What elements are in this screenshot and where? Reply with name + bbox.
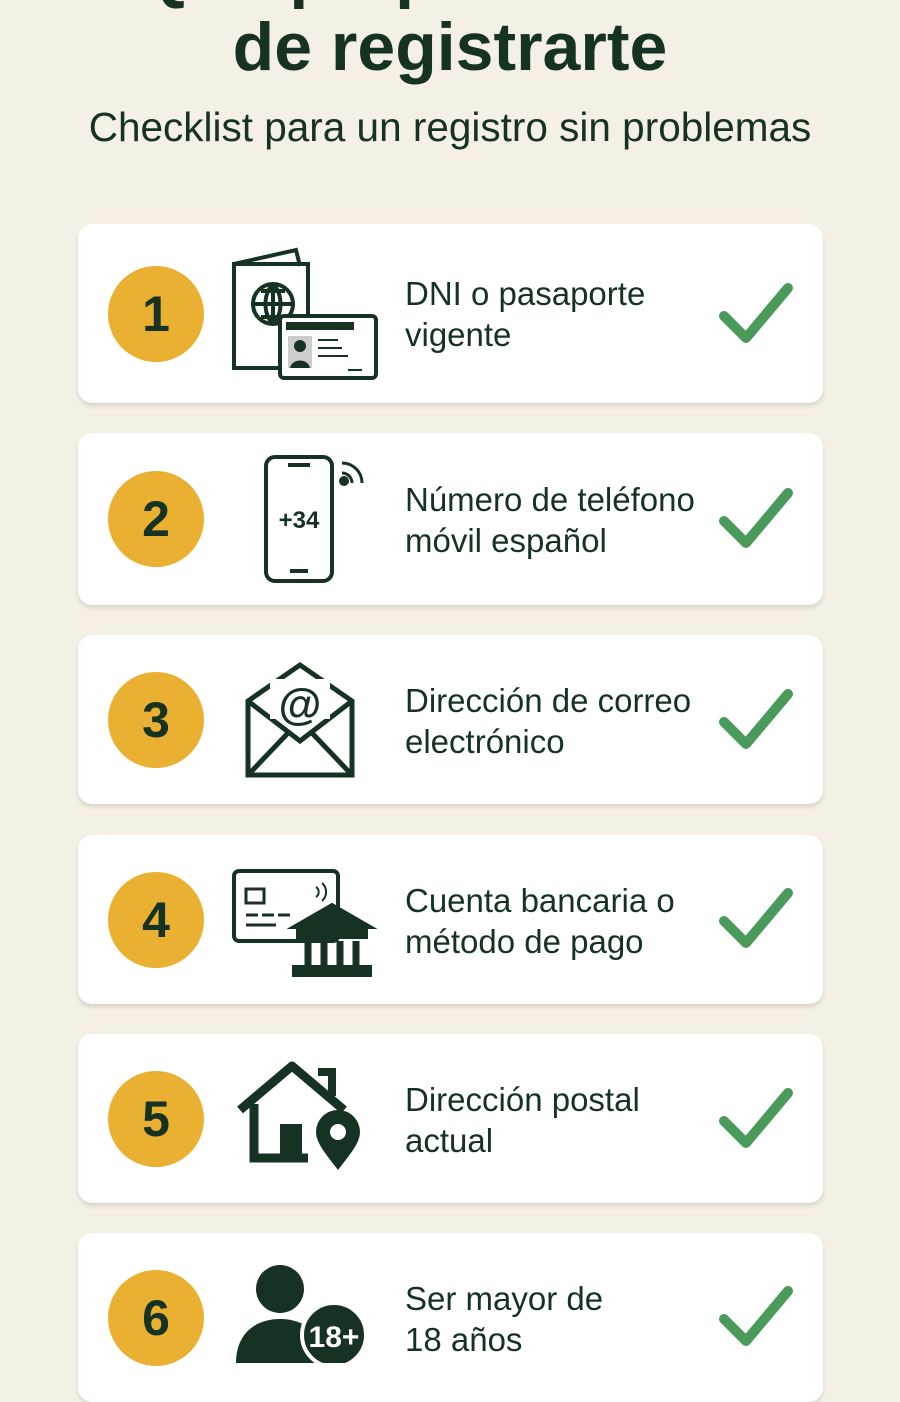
subtitle: Checklist para un registro sin problemas bbox=[89, 104, 811, 150]
text bbox=[405, 682, 691, 760]
number 3 bbox=[108, 672, 204, 768]
icon: phone bbox=[264, 455, 364, 583]
text: electrónico bbox=[405, 723, 565, 760]
text bbox=[405, 882, 675, 960]
card 5 bbox=[78, 1034, 823, 1203]
check bbox=[719, 1088, 793, 1148]
card 6 bbox=[78, 1233, 823, 1402]
number 4 bbox=[108, 872, 204, 968]
text: Número de teléfono bbox=[405, 481, 695, 518]
text: vigente bbox=[405, 316, 511, 353]
text bbox=[405, 275, 645, 353]
icon: email bbox=[246, 662, 354, 778]
card 2 bbox=[78, 433, 823, 605]
title: de registrarte bbox=[233, 9, 667, 85]
text bbox=[405, 1280, 603, 1358]
text: Cuenta bancaria o bbox=[405, 882, 675, 919]
text bbox=[405, 1081, 640, 1159]
check bbox=[719, 488, 793, 548]
check bbox=[719, 888, 793, 948]
text: Dirección postal bbox=[405, 1081, 640, 1118]
number 6 bbox=[108, 1270, 204, 1366]
icon: house with pin bbox=[237, 1062, 360, 1170]
number 1: 1 bbox=[142, 286, 170, 342]
number 1 bbox=[108, 266, 204, 362]
card 3 bbox=[78, 635, 823, 804]
card 4 bbox=[78, 835, 823, 1004]
check bbox=[719, 689, 793, 749]
number 2 bbox=[108, 471, 204, 567]
icon: person 18+ bbox=[236, 1265, 364, 1363]
icon: card and bank bbox=[232, 869, 378, 977]
number 5: 5 bbox=[142, 1091, 170, 1147]
card 1 bbox=[78, 224, 823, 403]
check bbox=[719, 1286, 793, 1346]
text: Dirección de correo bbox=[405, 682, 691, 719]
number 6: 6 bbox=[142, 1290, 170, 1346]
text: método de pago bbox=[405, 923, 644, 960]
number 5 bbox=[108, 1071, 204, 1167]
text: 18 años bbox=[405, 1321, 522, 1358]
number 3: 3 bbox=[142, 692, 170, 748]
icon: person 18+: 18+ bbox=[309, 1321, 359, 1354]
text bbox=[405, 481, 695, 559]
icon: passport and id bbox=[232, 248, 378, 380]
text: Ser mayor de bbox=[405, 1280, 603, 1317]
icon: email: @ bbox=[279, 680, 321, 729]
text: móvil español bbox=[405, 522, 607, 559]
check bbox=[719, 283, 793, 343]
icon: phone: +34 bbox=[279, 507, 320, 534]
text: DNI o pasaporte bbox=[405, 275, 645, 312]
text: actual bbox=[405, 1122, 493, 1159]
number 2: 2 bbox=[142, 491, 170, 547]
number 4: 4 bbox=[142, 892, 170, 948]
